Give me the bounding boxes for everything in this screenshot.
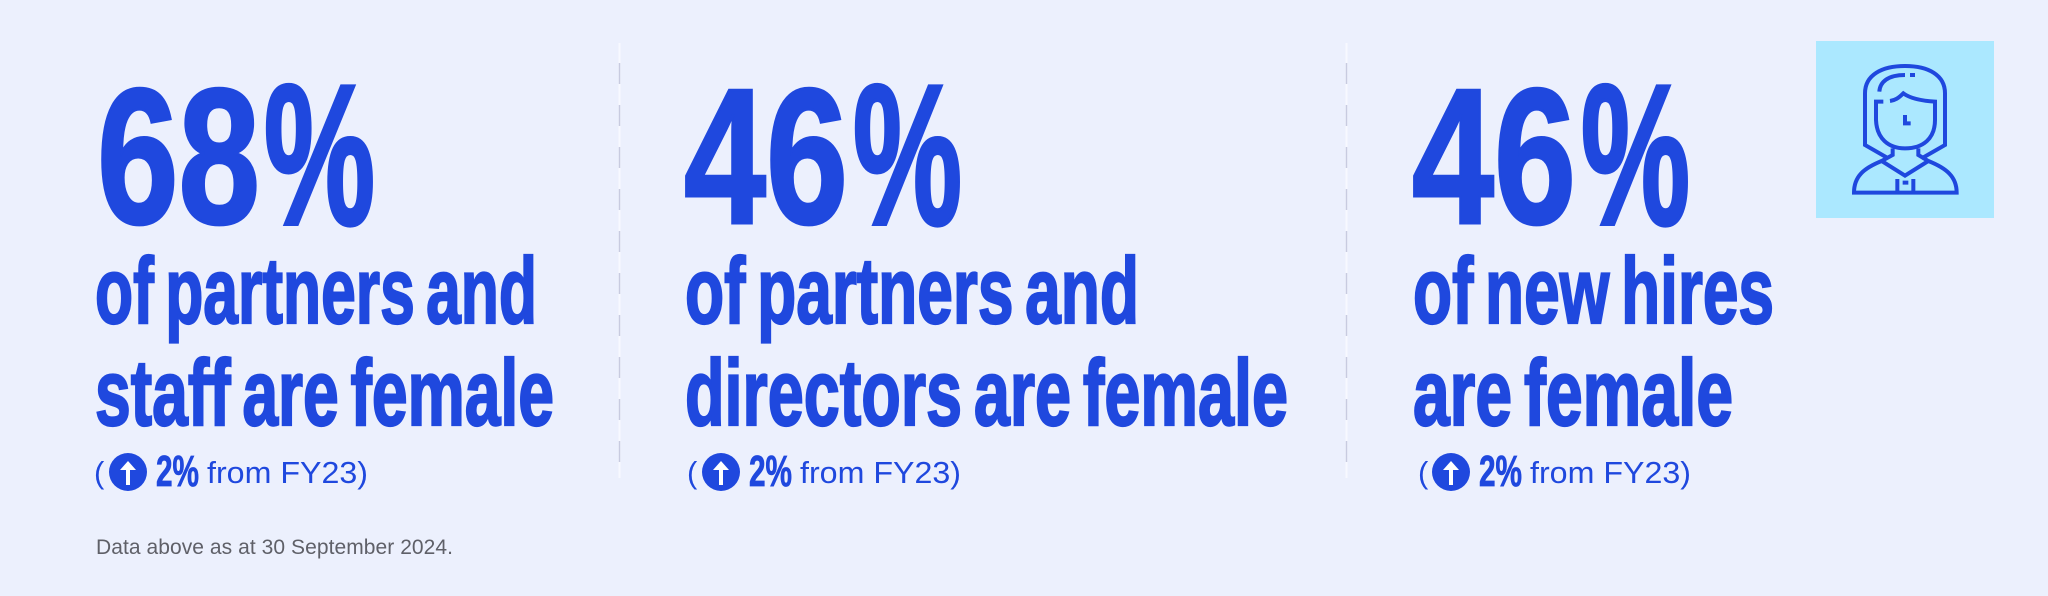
change note: up 2% from FY23: ( <box>687 455 698 490</box>
heading: of new hires are female: are female <box>1413 340 1733 445</box>
heading: of partners and staff are female: of partners and <box>95 238 537 343</box>
stat: 46%: 46 <box>1412 48 1576 264</box>
change note: up 2% from FY23 <box>687 447 961 496</box>
footnote: Data above as at 30 September 2024. <box>96 536 453 559</box>
change note: up 2% from FY23: 2% <box>749 447 792 496</box>
change note: up 2% from FY23: from FY23) <box>800 455 961 490</box>
icon: woman on light blue tile <box>1816 41 1994 218</box>
change note: up 2% from FY23 <box>1418 447 1691 496</box>
heading: of partners and directors are female: directors are female <box>685 340 1288 445</box>
stat: 46%: 46 <box>684 48 848 264</box>
heading: of new hires are female <box>1413 238 1774 445</box>
stat: 46%: % <box>1581 44 1690 267</box>
change note: up 2% from FY23: ( <box>94 455 105 490</box>
heading: of partners and directors are female <box>685 238 1288 445</box>
heading: of partners and staff are female: staff are female <box>95 340 554 445</box>
panel: partners and directors <box>684 44 1288 496</box>
change note: up 2% from FY23: from FY23) <box>207 455 368 490</box>
panel: partners and staff <box>94 44 554 496</box>
change note: up 2% from FY23: 2% <box>156 447 199 496</box>
heading: of new hires are female: of new hires <box>1413 238 1774 343</box>
change note: up 2% from FY23: from FY23) <box>1530 455 1691 490</box>
stat: 68%: 68 <box>97 48 260 264</box>
change note: up 2% from FY23: ( <box>1418 455 1429 490</box>
change note: up 2% from FY23 <box>94 447 368 496</box>
heading: of partners and directors are female: of partners and <box>685 238 1139 343</box>
panel: new hires <box>1412 44 1774 496</box>
heading: of partners and staff are female <box>95 238 554 445</box>
stat: 46%: % <box>853 44 962 267</box>
stat: 68%: % <box>264 44 375 267</box>
change note: up 2% from FY23: 2% <box>1479 447 1522 496</box>
